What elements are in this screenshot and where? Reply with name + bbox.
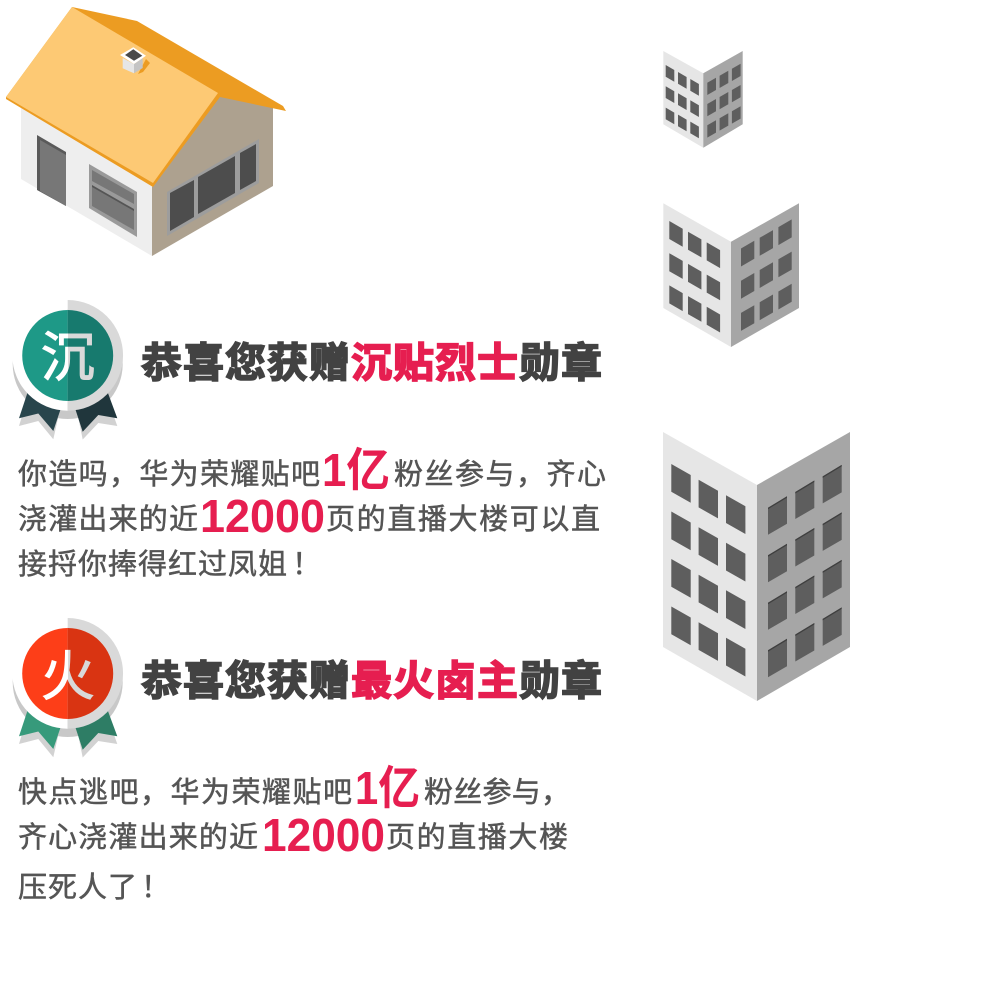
front window bbox=[89, 164, 137, 237]
heading: medal two: 恭喜您获赠最火卤主勋章 bbox=[141, 658, 602, 704]
icon: large building bbox=[663, 432, 850, 701]
house roof back and eaves bbox=[6, 7, 286, 187]
icon: small building bbox=[663, 51, 743, 148]
text block: medal two description: 齐心浇灌出来的近 bbox=[18, 821, 258, 854]
icon: house bbox=[6, 7, 286, 256]
text block: medal two description bbox=[18, 762, 570, 904]
text block: medal one description: ！ bbox=[292, 549, 321, 581]
house front wall bbox=[21, 108, 152, 256]
house side wall bbox=[152, 96, 273, 256]
text block: medal two description: 粉丝参与， bbox=[424, 776, 570, 809]
text block: medal one description bbox=[18, 444, 606, 581]
text block: medal one description: 页的直播大楼可以直 bbox=[326, 503, 600, 536]
icon: teal medal bbox=[12, 300, 123, 440]
text block: medal one description: 接捋你捧得红过凤姐 bbox=[18, 548, 287, 581]
icon: medium building bbox=[663, 203, 799, 347]
door bbox=[37, 135, 66, 206]
text block: medal two description: 压死人了 bbox=[18, 872, 137, 904]
icon: red medal bbox=[12, 618, 123, 758]
icon: red medal: 火 bbox=[41, 647, 95, 707]
side windows bbox=[167, 139, 259, 236]
text block: medal two description: 页的直播大楼 bbox=[386, 821, 568, 854]
text block: medal two description: 12000 bbox=[262, 809, 385, 861]
text block: medal one description: 粉丝参与，齐心 bbox=[394, 458, 606, 491]
text block: medal two description: ！ bbox=[141, 872, 170, 904]
text block: medal one description: 1亿 bbox=[322, 444, 390, 496]
heading: medal one: 恭喜您获赠沉贴烈士勋章 bbox=[141, 340, 602, 386]
house roof front bbox=[6, 7, 218, 183]
text block: medal two description: 1亿 bbox=[355, 762, 420, 814]
text block: medal two description: 快点逃吧，华为荣耀贴吧 bbox=[18, 776, 352, 809]
chimney bbox=[120, 47, 150, 74]
icon: teal medal: 沉 bbox=[41, 328, 95, 388]
text block: medal one description: 12000 bbox=[200, 490, 325, 542]
text block: medal one description: 浇灌出来的近 bbox=[18, 503, 198, 536]
text block: medal one description: 你造吗，华为荣耀贴吧 bbox=[18, 458, 320, 491]
